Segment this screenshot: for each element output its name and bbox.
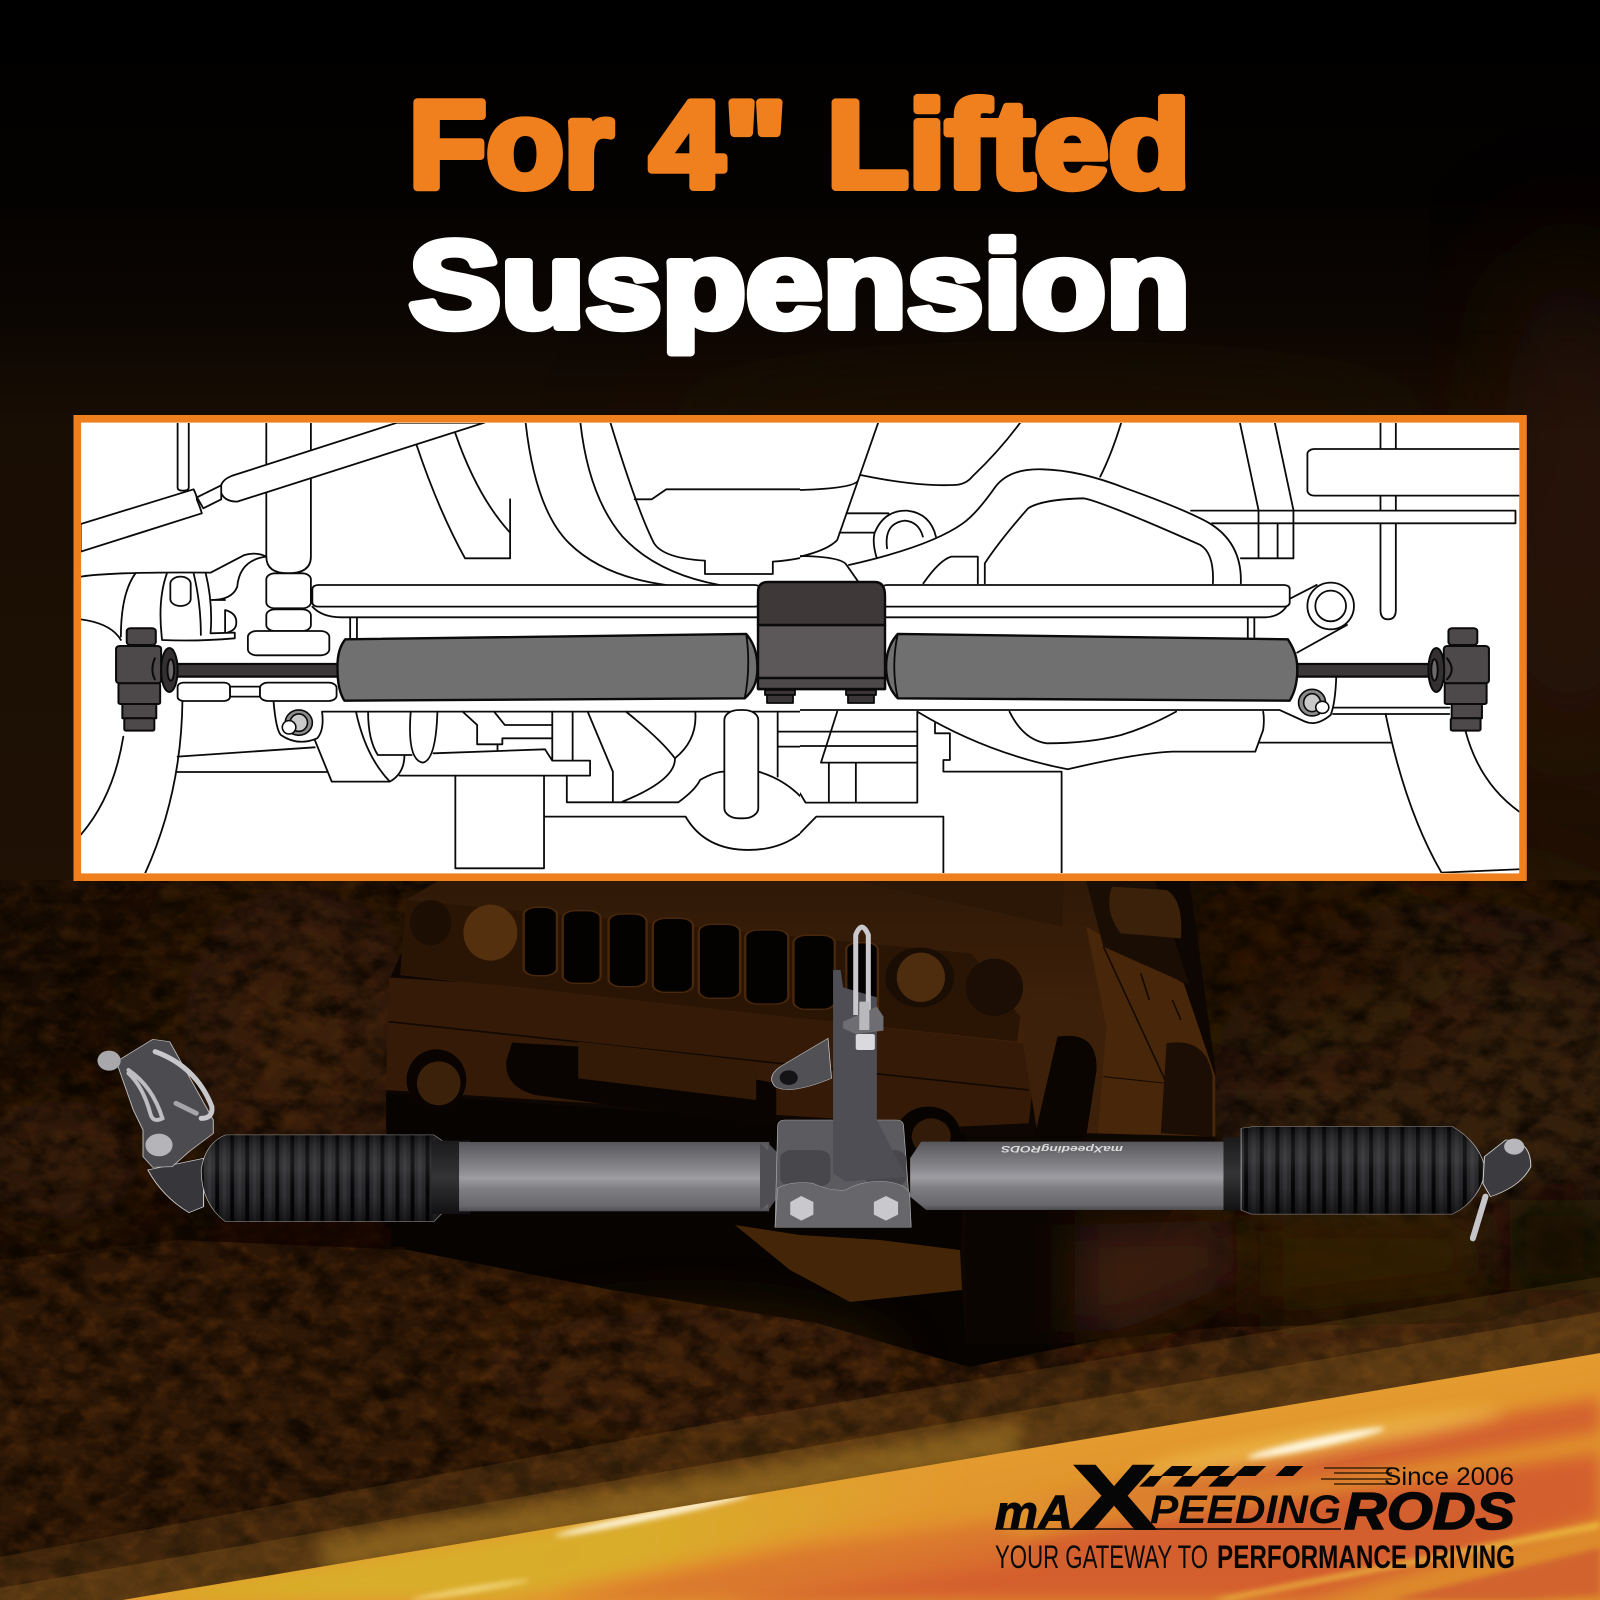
logo since text: Since 2006 — [1384, 1463, 1514, 1491]
u-bolt pin — [97, 1051, 121, 1071]
streak soft top edge — [320, 1423, 1020, 1574]
diagonal rod connector — [197, 485, 221, 508]
lower bumper shadow — [386, 1093, 966, 1267]
cylinder end cap line — [745, 634, 748, 698]
road patch behind wheel — [735, 1225, 962, 1302]
background: forest and field glow — [0, 880, 1600, 1340]
axle arch inner — [985, 498, 1213, 583]
bracket ear — [772, 1038, 832, 1090]
logo X: X — [1072, 1447, 1156, 1549]
steering rod left — [174, 664, 338, 677]
tube neck — [768, 1143, 783, 1210]
rubber boot — [201, 1135, 444, 1222]
stabilizer cylinder right — [886, 634, 1297, 701]
upper engine curves — [800, 423, 1121, 557]
left tube — [459, 1142, 769, 1211]
background: car shadow on road — [385, 1200, 1070, 1375]
product: right half of steering stabilizer — [760, 927, 1531, 1238]
grille slots — [524, 907, 878, 1014]
background: dirt road — [0, 1200, 1600, 1600]
diagram: left half line art — [81, 423, 830, 873]
front wheel — [966, 1137, 1084, 1343]
boot collar — [1223, 1137, 1259, 1211]
nut — [856, 1034, 875, 1050]
long tie bar — [881, 585, 1290, 607]
bolt plate — [843, 1007, 883, 1034]
post joint lower — [266, 609, 311, 631]
nut left — [765, 690, 795, 703]
windshield — [857, 881, 1064, 927]
steering rod right — [1297, 664, 1432, 677]
cylinder end cap line — [894, 634, 898, 698]
background: off-road vehicle — [386, 881, 1215, 1343]
logo tagline light: YOUR GATEWAY TO — [995, 1539, 1208, 1575]
door window — [1086, 881, 1190, 985]
end joint left — [116, 628, 178, 731]
right tube — [910, 1142, 1226, 1210]
steering knuckle — [81, 554, 266, 641]
grille panel — [400, 900, 1020, 1042]
bumper — [386, 977, 1035, 1127]
lower tie rod bars — [178, 683, 337, 701]
background: orange light streak — [122, 1353, 1600, 1600]
license plate — [578, 1042, 756, 1100]
wheel dirt spray — [1075, 1220, 1240, 1335]
nut right — [846, 690, 876, 703]
leaf straps — [417, 433, 510, 558]
bumper crease — [389, 1022, 1029, 1090]
logo tagline bold: PERFORMANCE DRIVING — [1217, 1539, 1515, 1575]
logo mA: mA — [995, 1487, 1073, 1540]
rounded plate — [1307, 449, 1526, 496]
yellow line — [1210, 1522, 1600, 1600]
logo underline — [995, 1528, 1341, 1530]
side body panel — [1086, 927, 1215, 1137]
long tie bar — [312, 585, 761, 607]
wing mirror — [1109, 887, 1181, 938]
logo RODS: RODS — [1344, 1483, 1515, 1541]
lower highlight — [410, 1578, 530, 1600]
knuckle tab — [225, 610, 236, 633]
post joint upper — [266, 573, 311, 608]
title: For 4" Lifted: For — [409, 77, 613, 214]
lower line work — [800, 712, 1519, 873]
middle highlight — [554, 1490, 752, 1540]
logo speed lines — [1321, 1468, 1392, 1484]
block base strip — [758, 678, 885, 689]
title: For 4" Lifted: 4" — [650, 77, 787, 214]
center pill — [724, 710, 758, 818]
stabilizer cylinder left — [337, 634, 757, 701]
clamp bolt right — [874, 1196, 898, 1221]
axle arch outer — [849, 469, 1241, 583]
diagonal upper rod — [220, 423, 484, 502]
diagram: right half line art — [800, 423, 1526, 873]
left bracket — [116, 1039, 213, 1167]
main red band — [720, 1453, 1600, 1600]
title: For 4" Lifted: Lifted — [827, 77, 1190, 214]
right fog lamp — [897, 1107, 960, 1160]
left ball joint — [148, 1158, 204, 1213]
drag link lower edge — [312, 607, 761, 639]
upper red band — [1057, 1392, 1600, 1518]
ear hole — [780, 1070, 798, 1085]
mounting bolt — [282, 710, 312, 735]
product: engraved tube logo: maXpeedingRODS — [1001, 1144, 1123, 1154]
eye link arms — [1284, 585, 1347, 653]
center orange-red area — [560, 1520, 1040, 1600]
knuckle slot — [170, 577, 191, 606]
background: dark night gradient — [0, 0, 1600, 900]
lower mechanical parts — [177, 712, 590, 782]
u-bolt — [856, 927, 868, 1015]
clamp bolt left — [790, 1196, 813, 1221]
spray right — [1260, 1215, 1490, 1315]
left tube neck — [760, 1143, 778, 1210]
boot shading — [201, 1135, 444, 1222]
ball joint cap — [1504, 1139, 1524, 1155]
boot collar — [431, 1141, 470, 1214]
threaded stud — [859, 1002, 869, 1030]
block lower body — [758, 625, 885, 689]
lower clamp — [775, 1181, 911, 1227]
rubber boot — [1241, 1127, 1485, 1214]
title: For 4" Lifted — [409, 77, 1190, 214]
bearing left — [780, 1150, 831, 1187]
end joint right — [1428, 628, 1489, 731]
mounting bolt — [1299, 689, 1329, 716]
eye ring — [1307, 583, 1354, 629]
gold left glow — [144, 1485, 838, 1600]
left fog lamp — [407, 1049, 466, 1111]
vehicle silhouette — [386, 881, 1215, 1343]
air vent — [506, 1043, 776, 1127]
bracket bolt head — [145, 1134, 173, 1156]
fender and wheel arch — [1023, 994, 1212, 1137]
door lines — [1103, 947, 1181, 1083]
upright bracket — [833, 970, 906, 1182]
oil pan — [610, 423, 830, 574]
background: translucent inner band — [0, 1312, 1600, 1600]
drag link lower edge — [881, 607, 1286, 639]
chassis curves — [526, 423, 719, 585]
logo checkered flag — [1139, 1466, 1303, 1487]
u-bolt left — [128, 1052, 212, 1120]
differential outline — [455, 712, 830, 868]
boot shading — [1241, 1127, 1485, 1214]
horizontal crossbar — [1191, 511, 1515, 523]
block top — [758, 582, 885, 625]
logo: maXpeedingRODS — [995, 1447, 1515, 1575]
cover and brace lines — [800, 423, 1293, 583]
diagram: central mounting block — [758, 582, 885, 703]
vertical post — [266, 423, 311, 573]
bearing right — [866, 1150, 906, 1187]
ball stud — [1473, 1197, 1485, 1238]
wheel arcs — [81, 573, 182, 873]
logo PEEDING: PEEDING — [1150, 1488, 1341, 1532]
vertical post behind plate — [1380, 423, 1396, 619]
panel: suspension diagram frame — [77, 419, 1523, 877]
diagonal lower tube — [81, 489, 202, 552]
lower frame rails — [800, 677, 1449, 723]
upper highlight — [1246, 1424, 1386, 1462]
thin vertical strut — [178, 423, 189, 491]
headlights and indicators — [410, 900, 1023, 1016]
title: Suspension: Suspension — [409, 217, 1190, 354]
lower red corner — [1390, 1548, 1600, 1600]
mount base plate — [775, 1120, 911, 1227]
upper highlight glow — [1142, 1406, 1501, 1482]
product: left half of steering stabilizer — [97, 1039, 783, 1222]
post foot — [248, 631, 329, 655]
mounting bracket and lower frame rail — [274, 702, 830, 742]
ball joint — [1483, 1140, 1531, 1197]
background: translucent outer band — [0, 1277, 1600, 1600]
hood and fender surface — [400, 881, 1106, 1050]
right edge shadow — [1510, 1200, 1600, 1290]
